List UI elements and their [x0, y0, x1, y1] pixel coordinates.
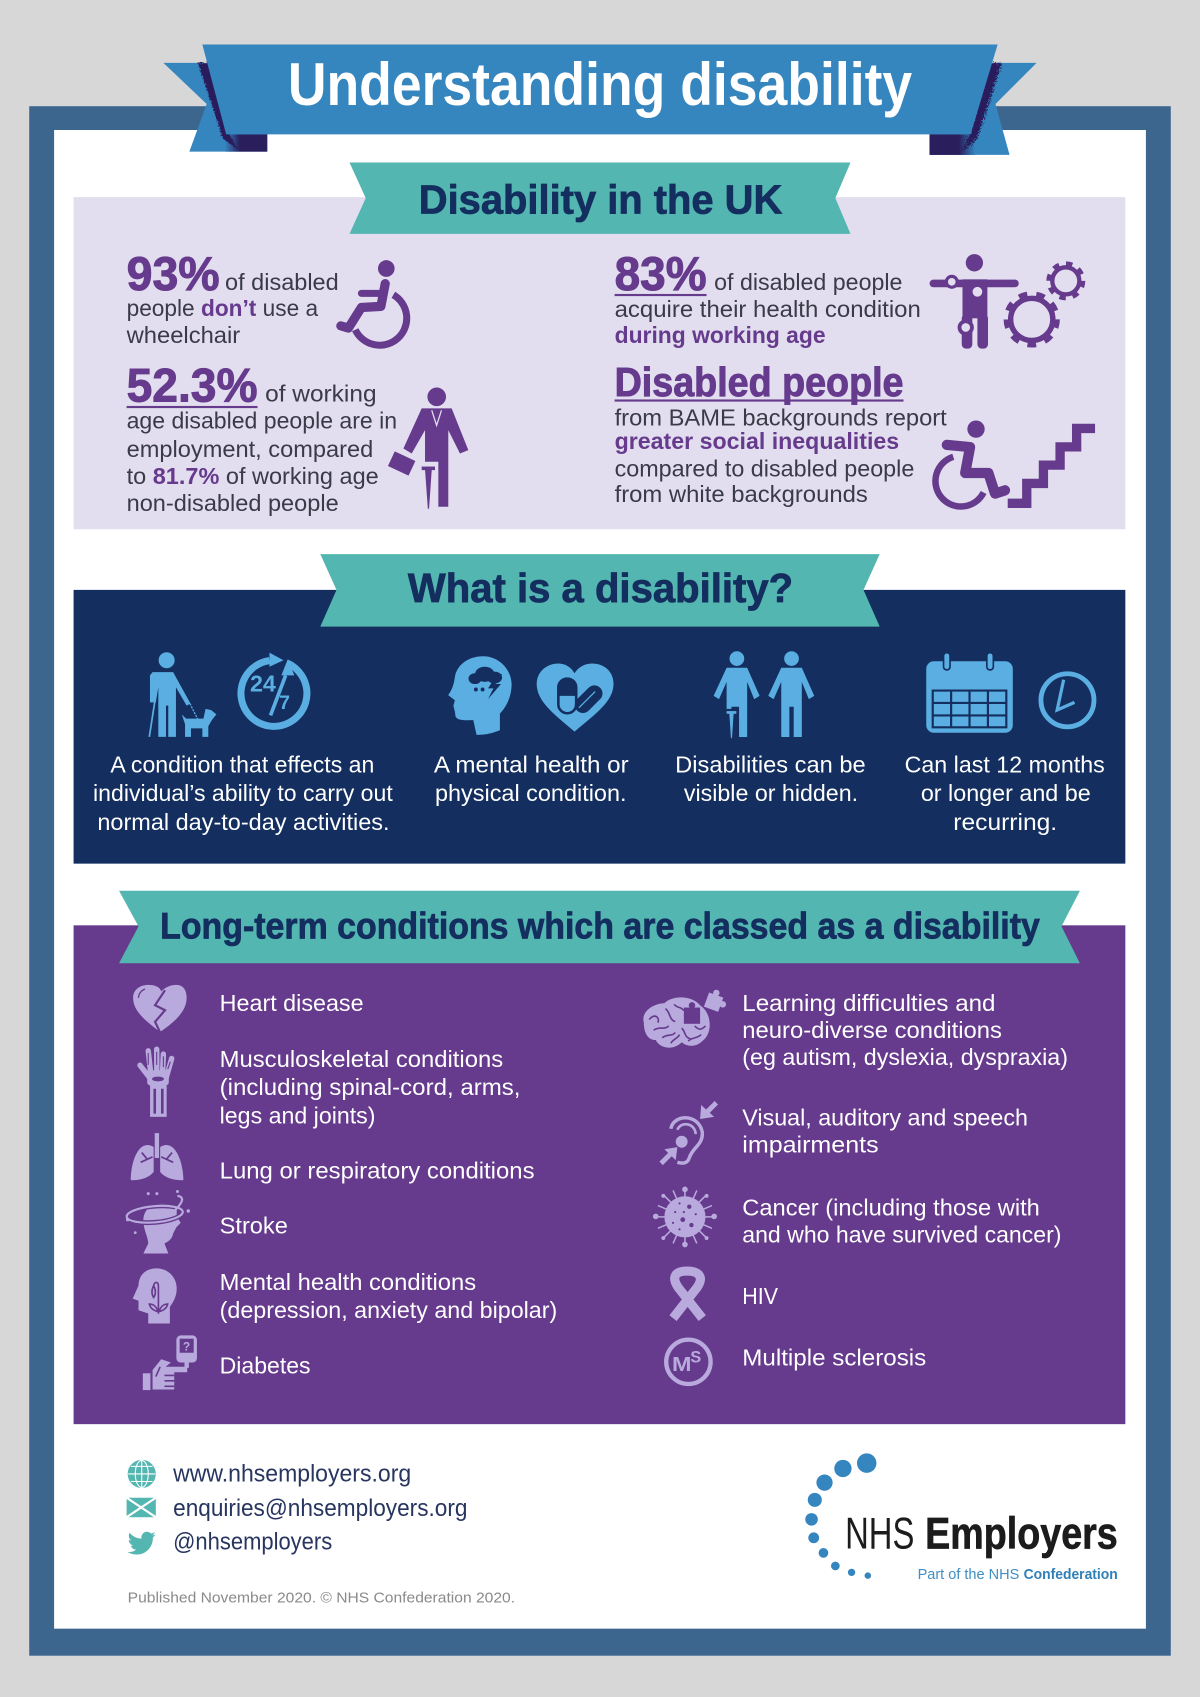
text: mental health conditions: Mental health conditions	[220, 1269, 476, 1295]
text: mental health conditions	[220, 1269, 557, 1323]
text: visual auditory speech: impairments	[742, 1132, 879, 1158]
text: duration	[905, 752, 1105, 835]
icon: MS badge	[666, 1340, 711, 1384]
heading banner: long-term conditions: Long-term conditions which are classed as a disability	[160, 905, 1040, 946]
stat: 93%: 93%	[127, 248, 220, 301]
text: cancer: Cancer (including those with	[742, 1194, 1040, 1220]
text: musculoskeletal: legs and joints)	[220, 1102, 375, 1128]
icon: broken heart	[133, 985, 187, 1032]
stat: 83%	[615, 248, 921, 348]
stat: disabled people from BAME backgrounds: from white backgrounds	[615, 481, 868, 507]
icon: clock	[1041, 674, 1094, 727]
icon: person with cane and dog	[149, 652, 216, 737]
stat: disabled people from BAME backgrounds	[615, 359, 948, 507]
text: HIV: HIV	[742, 1283, 779, 1309]
stat: 83%: of disabled people	[714, 269, 902, 295]
panel: long-term conditions	[74, 891, 1125, 1424]
text: mental health	[434, 752, 629, 806]
logo: NHS Employers: Employers	[925, 1510, 1118, 1559]
text: a condition	[93, 752, 393, 835]
text: lung: Lung or respiratory conditions	[220, 1158, 535, 1184]
text: multiple sclerosis: Multiple sclerosis	[742, 1345, 926, 1371]
text: a condition: A condition that effects an	[110, 752, 374, 778]
icon: person with joints and gears	[933, 254, 1083, 349]
icon: wheelchair user	[341, 260, 407, 345]
stat: 52.3%: to 81.7% of working age	[127, 463, 379, 489]
text: visual auditory speech	[742, 1105, 1028, 1158]
text: visible or hidden	[675, 752, 866, 806]
publication note: Published November 2020. © NHS Confederation 2020.	[128, 1590, 515, 1607]
icon: cancer cell	[653, 1187, 717, 1247]
icon: awareness ribbon	[673, 1271, 702, 1318]
stat: 52.3%: 52.3%	[127, 360, 258, 413]
stat: 93%: wheelchair	[126, 322, 241, 348]
stat: 52.3%: of working	[265, 381, 377, 407]
stat: 52.3%: age disabled people are in	[127, 408, 397, 434]
icon: hand and arm bones	[140, 1049, 172, 1117]
icon: MS badge: M	[672, 1353, 691, 1376]
text: visual auditory speech: Visual, auditory and speech	[742, 1105, 1028, 1131]
icon: 24/7 clock: 7	[279, 692, 290, 714]
text: learning difficulties	[742, 990, 1068, 1070]
text: mental health: physical condition.	[435, 780, 627, 806]
text: a condition: individual’s ability to carry out	[93, 780, 393, 806]
contact details	[127, 1460, 467, 1556]
text: diabetes: Diabetes	[220, 1352, 311, 1378]
icon: employee with prosthetic leg	[388, 388, 468, 509]
logo: NHS Employers: Confederation	[1024, 1566, 1118, 1583]
icon: head with storm cloud	[448, 656, 512, 735]
icon: wheelchair user at stairs	[935, 420, 1095, 506]
text: cancer	[742, 1194, 1061, 1247]
text: mental health conditions: (depression, anxiety and bipolar)	[220, 1297, 557, 1323]
stat: 83%: acquire their health condition	[615, 296, 921, 322]
text: email: enquiries@nhsemployers.org	[173, 1495, 467, 1522]
icon: twitter bird	[128, 1532, 156, 1555]
icon: mail	[127, 1498, 156, 1517]
text: visible or hidden: visible or hidden.	[684, 780, 858, 806]
text: visible or hidden: Disabilities can be	[675, 752, 866, 778]
icon: glucose meter in hand: ?	[183, 1340, 190, 1354]
stat: 93%	[126, 248, 339, 348]
stat: disabled people from BAME backgrounds: greater social inequalities	[615, 428, 899, 454]
heading banner: disability in the UK	[350, 162, 850, 234]
stat: disabled people from BAME backgrounds: Disabled people	[615, 359, 904, 405]
stat: 93%: people don’t use a	[127, 295, 318, 321]
title banner	[163, 45, 1037, 155]
stat: disabled people from BAME backgrounds: from BAME backgrounds report	[615, 404, 948, 430]
text: website: www.nhsemployers.org	[172, 1461, 411, 1488]
text: duration: Can last 12 months	[905, 752, 1105, 778]
text: stroke: Stroke	[220, 1213, 288, 1239]
icon: dizzy head	[126, 1190, 190, 1254]
text: musculoskeletal: (including spinal-cord, arms,	[220, 1074, 520, 1100]
text: learning difficulties: neuro-diverse conditions	[742, 1017, 1002, 1043]
stat: 52.3%: non-disabled people	[127, 490, 339, 516]
text: twitter handle: @nhsemployers	[173, 1529, 332, 1556]
icon: lungs	[131, 1133, 183, 1180]
icon: two people	[714, 651, 814, 738]
text: duration: or longer and be	[921, 780, 1091, 806]
text: mental health: A mental health or	[434, 752, 629, 778]
icon: calendar	[926, 653, 1013, 733]
heading banner: what is a disability	[320, 554, 880, 627]
stat: 83%: during working age	[615, 322, 826, 348]
icon: MS badge: S	[690, 1348, 701, 1366]
stat: 52.3%	[127, 360, 397, 516]
stat: 52.3%: employment, compared	[127, 436, 373, 462]
heading banner: long-term conditions	[119, 891, 1080, 963]
icon: 24/7 clock: 24	[250, 671, 276, 697]
panel: what is a disability	[74, 554, 1125, 864]
text: learning difficulties: Learning difficulties and	[742, 990, 995, 1016]
stat: disabled people from BAME backgrounds: compared to disabled people	[615, 455, 914, 481]
text: cancer: and who have survived cancer)	[742, 1221, 1061, 1247]
icon: heart with pills	[537, 663, 614, 732]
icon: 24/7 clock	[241, 653, 307, 726]
heading banner: what is a disability: What is a disability?	[408, 565, 793, 611]
heading banner: disability in the UK: Disability in the UK	[419, 176, 783, 222]
icon: head with plant	[133, 1268, 177, 1324]
stat: 93%: of disabled	[225, 269, 339, 295]
text: a condition: normal day-to-day activities.	[97, 809, 390, 835]
title text: Understanding disability	[288, 50, 912, 118]
logo: NHS Employers: Part of the NHS	[918, 1566, 1019, 1583]
icon: ear with arrows	[661, 1103, 716, 1163]
text: heart disease: Heart disease	[220, 990, 364, 1016]
text: learning difficulties: (eg autism, dyslexia, dyspraxia)	[742, 1044, 1068, 1070]
logo: NHS Employers: NHS	[845, 1510, 914, 1559]
icon: glucose meter in hand	[143, 1335, 197, 1390]
text: musculoskeletal	[220, 1046, 520, 1128]
panel: disability in the UK	[74, 162, 1125, 529]
icon: brain with puzzle piece	[643, 990, 726, 1048]
icon: globe	[128, 1460, 155, 1487]
text: duration: recurring.	[953, 809, 1057, 835]
stat: 83%: 83%	[615, 248, 707, 301]
text: musculoskeletal: Musculoskeletal conditions	[220, 1046, 503, 1072]
logo: NHS Employers	[805, 1453, 1118, 1583]
